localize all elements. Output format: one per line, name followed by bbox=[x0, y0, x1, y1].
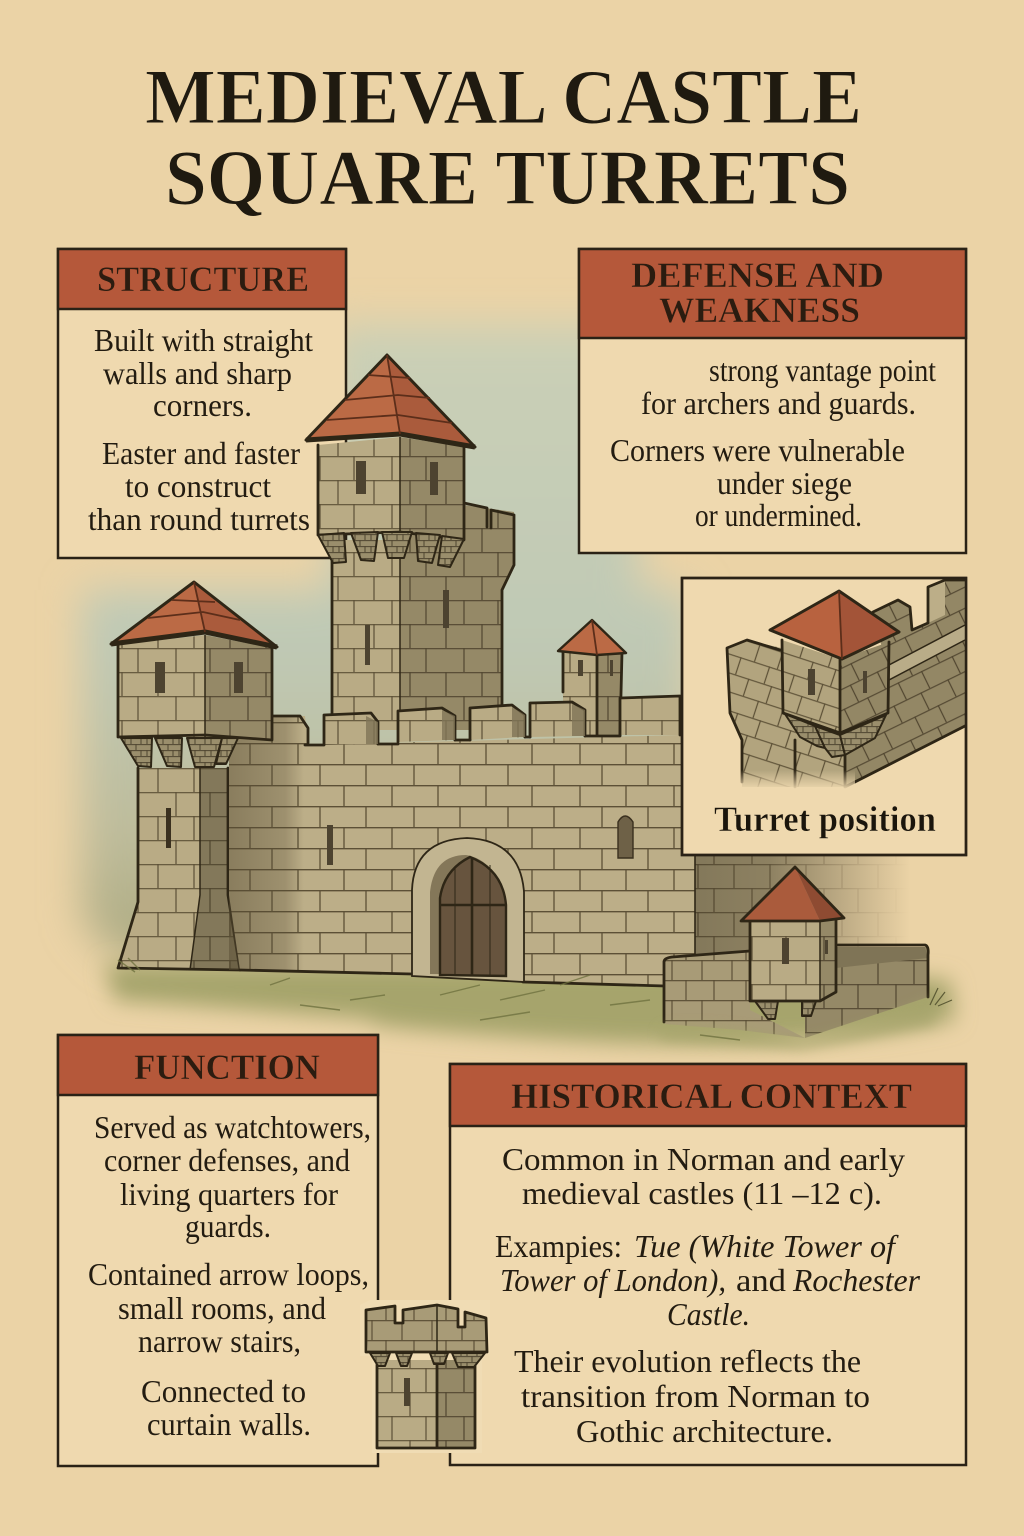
text block: function: guards. bbox=[185, 1208, 271, 1244]
text block: historical context: Their evolution reflects the bbox=[514, 1343, 861, 1379]
title: MEDIEVAL CASTLE bbox=[145, 53, 862, 140]
text block: structure: corners. bbox=[153, 387, 252, 423]
panel: function bbox=[58, 1035, 378, 1466]
text block: historical context: and bbox=[736, 1262, 786, 1298]
corbels bbox=[318, 532, 464, 567]
text block: function: narrow stairs, bbox=[138, 1323, 301, 1359]
text block: historical context: Gothic architecture. bbox=[576, 1413, 833, 1449]
panel: historical context bbox=[450, 1064, 966, 1465]
roof bbox=[770, 591, 842, 659]
illustration: castle bbox=[111, 355, 952, 1050]
text block: defense and weakness: under siege bbox=[717, 465, 852, 501]
text block: defense and weakness: for archers and guards. bbox=[641, 385, 916, 421]
heading: defense and weakness bbox=[631, 255, 884, 330]
text block: function: small rooms, and bbox=[118, 1290, 326, 1326]
text block: function: Contained arrow loops, bbox=[88, 1256, 369, 1292]
text block: structure: than round turrets bbox=[88, 501, 310, 537]
roof bbox=[306, 355, 475, 447]
text block: function bbox=[88, 1109, 371, 1442]
text block: historical context bbox=[495, 1141, 921, 1449]
foreground low wall and small turret bbox=[660, 867, 952, 1050]
text block: historical context: medieval castles (11 –12 c). bbox=[522, 1175, 882, 1211]
door bbox=[440, 857, 506, 976]
diagram: turret position bbox=[725, 580, 965, 790]
text block: defense and weakness: or undermined. bbox=[695, 497, 862, 533]
gate bbox=[412, 838, 524, 982]
text block: structure bbox=[88, 322, 313, 537]
text block: function: living quarters for bbox=[120, 1176, 338, 1212]
text block: historical context: Exampies: bbox=[495, 1228, 622, 1264]
left tower turret bbox=[111, 582, 277, 767]
text block: historical context: Rochester bbox=[792, 1262, 921, 1298]
icon: small square tower bbox=[360, 1300, 490, 1453]
turret body bbox=[782, 640, 840, 733]
small rear tower bbox=[558, 620, 626, 735]
text block: historical context: Castle. bbox=[667, 1296, 750, 1332]
central tower turret bbox=[306, 355, 475, 567]
panel: turret position bbox=[682, 578, 966, 855]
roof bbox=[111, 582, 277, 647]
text block: historical context: Tue (White Tower of bbox=[634, 1228, 899, 1264]
caption: Turret position bbox=[714, 799, 936, 839]
text block: structure: walls and sharp bbox=[103, 355, 292, 391]
ground bbox=[105, 965, 955, 1044]
panel: structure bbox=[58, 249, 346, 558]
heading: function: FUNCTION bbox=[134, 1047, 320, 1087]
text block: historical context: Tower of London), bbox=[500, 1262, 726, 1298]
text block: historical context: Common in Norman and early bbox=[502, 1141, 905, 1177]
text block: structure: to construct bbox=[125, 468, 271, 504]
grass tufts bbox=[118, 958, 740, 1040]
shaded rear wall bbox=[695, 855, 910, 985]
text block: defense and weakness: Corners were vulnerable bbox=[610, 432, 905, 468]
central tower shaft bbox=[332, 503, 514, 730]
sky behind castle bbox=[82, 325, 690, 960]
heading: historical context: HISTORICAL CONTEXT bbox=[511, 1076, 912, 1116]
text block: defense and weakness bbox=[610, 352, 936, 533]
text block: function: Connected to bbox=[141, 1373, 306, 1409]
heading: structure: STRUCTURE bbox=[97, 259, 309, 299]
main curtain wall bbox=[229, 716, 695, 986]
title: SQUARE TURRETS bbox=[165, 134, 850, 221]
heading: defense and weakness: DEFENSE AND bbox=[631, 255, 884, 295]
merlons bbox=[324, 696, 680, 745]
panel: defense and weakness bbox=[579, 249, 966, 553]
text block: function: curtain walls. bbox=[147, 1406, 311, 1442]
left tower shaft bbox=[118, 768, 240, 970]
text block: structure: Easter and faster bbox=[102, 435, 300, 471]
roof bbox=[741, 867, 844, 921]
text block: defense and weakness: strong vantage point bbox=[709, 352, 936, 388]
text block: function: corner defenses, and bbox=[104, 1142, 350, 1178]
corbels bbox=[121, 738, 238, 767]
title bbox=[145, 53, 862, 221]
heading: defense and weakness: WEAKNESS bbox=[659, 290, 860, 330]
panel border bbox=[682, 578, 966, 855]
text block: function: Served as watchtowers, bbox=[94, 1109, 371, 1145]
text block: historical context: transition from Norman to bbox=[521, 1378, 870, 1414]
text block: structure: Built with straight bbox=[94, 322, 313, 358]
